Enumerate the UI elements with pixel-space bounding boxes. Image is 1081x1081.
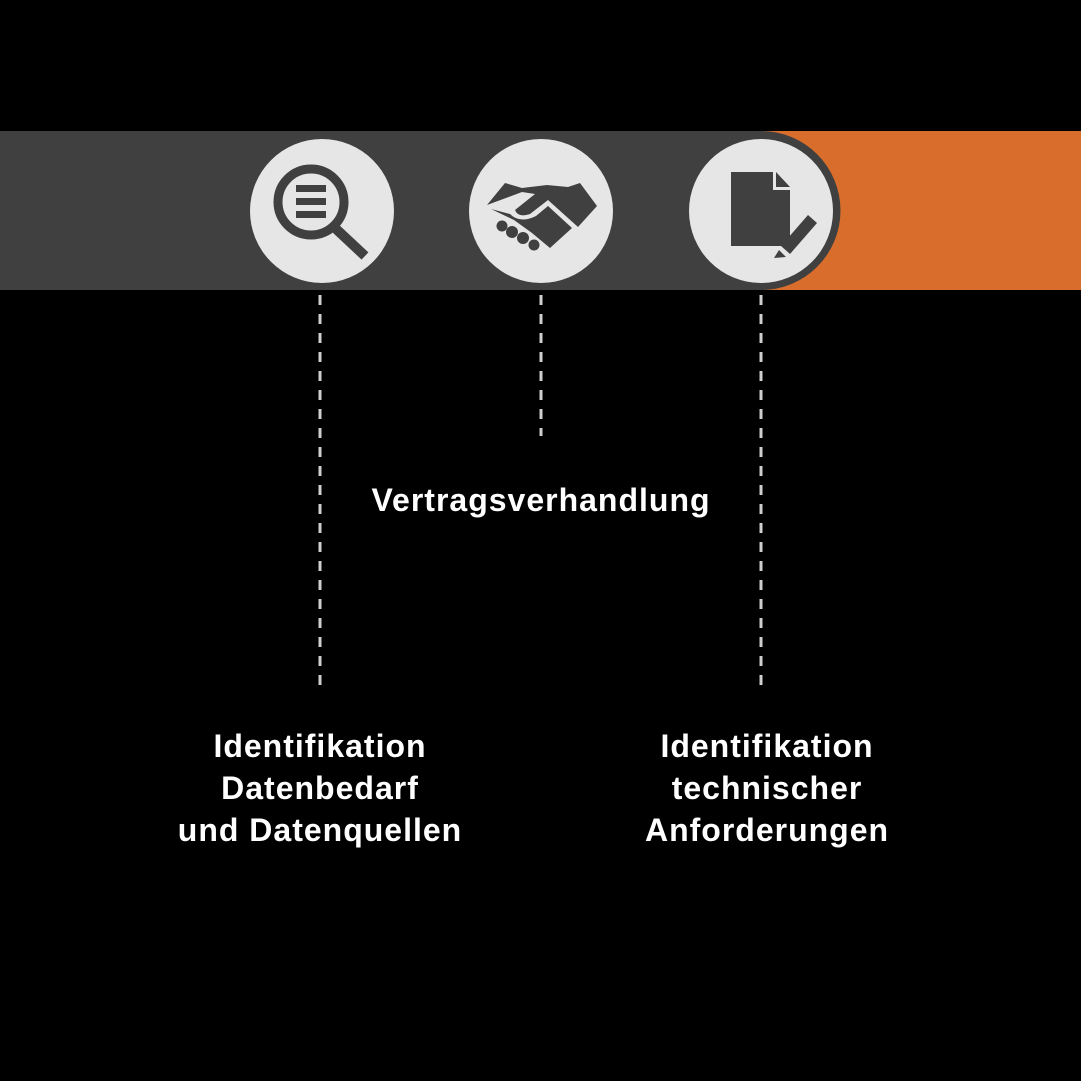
label: Identifikation technischer Anforderungen: Anforderungen xyxy=(645,812,889,848)
icon: magnifier with list xyxy=(250,139,394,283)
label: Identifikation Datenbedarf: Datenbedarf xyxy=(221,770,419,806)
band: process timeline bar xyxy=(0,131,1081,290)
label: Identifikation Datenbedarf: und Datenquellen xyxy=(178,812,462,848)
label: Identifikation technischer Anforderungen: technischer xyxy=(672,770,862,806)
dashed connector: middle xyxy=(540,295,542,436)
label: Vertragsverhandlung: Vertragsverhandlung xyxy=(371,482,711,518)
icon: handshake xyxy=(469,139,613,283)
label: Identifikation Datenbedarf xyxy=(178,728,462,848)
dashed connector: left xyxy=(318,295,322,686)
label: Identifikation technischer Anforderungen: Identifikation xyxy=(660,728,874,764)
label: Identifikation technischer Anforderungen xyxy=(645,728,889,848)
dashed connector: right xyxy=(760,295,762,686)
label: Identifikation Datenbedarf: Identifikation xyxy=(213,728,427,764)
icon: document with pencil xyxy=(689,139,833,283)
